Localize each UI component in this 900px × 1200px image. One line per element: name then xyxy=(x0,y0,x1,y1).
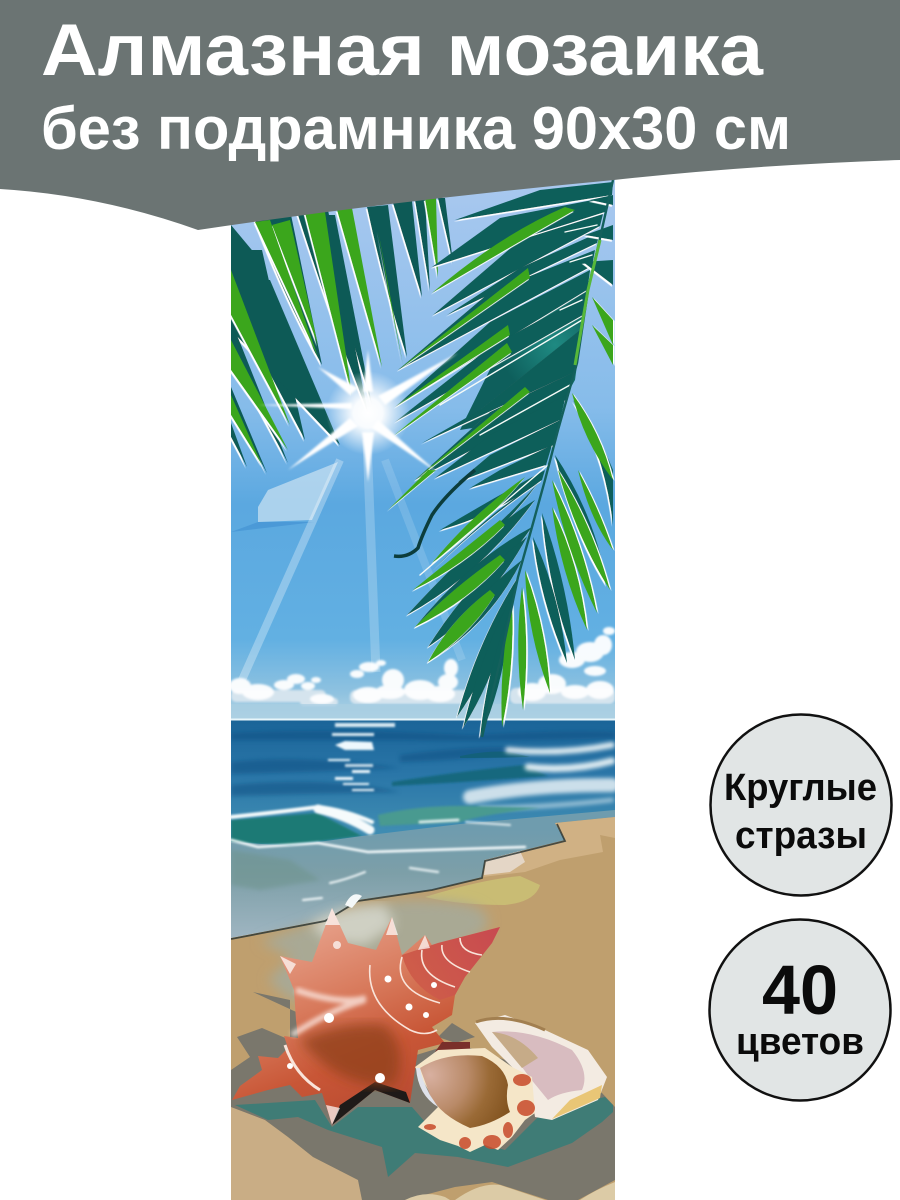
badge: 40 colours: цветов xyxy=(736,1021,864,1063)
light haze shape in sky xyxy=(258,462,338,522)
icon: back shell xyxy=(435,1015,607,1120)
conch spire xyxy=(402,927,500,1000)
sun rays xyxy=(242,440,462,680)
badge: 40 colours xyxy=(710,920,890,1100)
white slashes along rachis xyxy=(420,225,597,575)
red peek behind shells xyxy=(435,1042,470,1052)
conch white knobs xyxy=(287,941,437,1083)
sky xyxy=(231,170,615,722)
sea swell streaks xyxy=(231,731,615,796)
dark leaflets upper xyxy=(395,182,613,488)
subtitle: без подрамника 90х30 см xyxy=(41,95,791,162)
lower left sand xyxy=(231,1107,362,1200)
conch body xyxy=(232,908,500,1125)
lower right sand patches xyxy=(405,1182,615,1200)
shoreline xyxy=(231,824,565,939)
badge: round rhinestones xyxy=(710,714,892,896)
icon: conch shell xyxy=(232,908,500,1125)
shell shadow teal xyxy=(235,1097,613,1177)
conch spire rings xyxy=(285,938,482,1090)
title: Алмазная мозаика xyxy=(41,10,765,91)
horizon haze xyxy=(300,704,444,706)
breaker foam xyxy=(231,807,525,900)
conch highlight bands xyxy=(292,990,366,1035)
badge: round rhinestones: Круглые xyxy=(724,767,877,809)
green leaflets right side xyxy=(501,297,613,727)
dark leaflets xyxy=(231,198,453,473)
icon: front shell xyxy=(415,1048,535,1152)
badge: 40 colours: 40 xyxy=(762,951,838,1029)
badge: round rhinestones: стразы xyxy=(735,815,867,857)
swell teal xyxy=(392,765,548,786)
shallow water xyxy=(231,810,615,938)
shell shadow grey xyxy=(231,992,615,1200)
wet sand grey xyxy=(260,900,488,1000)
green leaflets xyxy=(231,198,438,465)
palm frond: left xyxy=(231,198,453,473)
conch brown belly xyxy=(300,1024,401,1085)
sun burst xyxy=(258,350,458,482)
palm frond: right xyxy=(388,180,613,737)
wet sand yellow reflection xyxy=(425,876,540,905)
shoreline foam xyxy=(345,894,362,908)
white waves xyxy=(470,745,612,808)
conch dark underside xyxy=(332,1082,410,1125)
rachis xyxy=(482,180,613,737)
clouds xyxy=(229,627,615,706)
green leaflets left side xyxy=(388,207,575,662)
sand beach xyxy=(231,817,615,1200)
header banner xyxy=(0,0,900,230)
dark teal centre of frond xyxy=(460,270,590,430)
conch spike tips xyxy=(280,908,430,1125)
sun glitter on water xyxy=(328,723,395,791)
breaker swell xyxy=(231,813,362,845)
curled dark leaflet xyxy=(394,470,475,556)
panel: beach photo xyxy=(229,170,615,1200)
dry sand band xyxy=(482,817,615,877)
sea xyxy=(231,720,615,850)
dark leaflets lower xyxy=(407,195,613,737)
